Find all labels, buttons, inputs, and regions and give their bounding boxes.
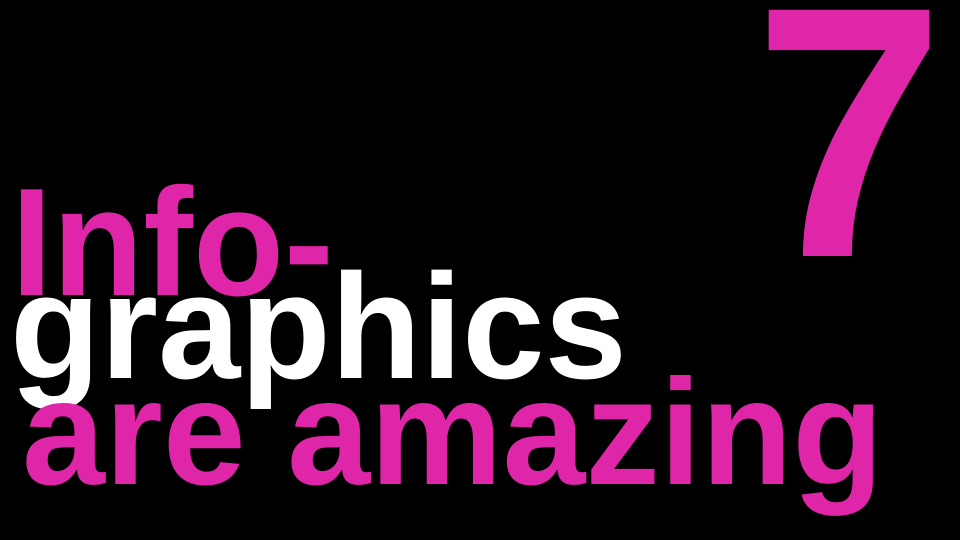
heading line: are amazing: are amazing (22, 348, 883, 516)
heading line: graphics: graphics (10, 244, 627, 410)
heading line: Info-: Info- (11, 156, 334, 328)
